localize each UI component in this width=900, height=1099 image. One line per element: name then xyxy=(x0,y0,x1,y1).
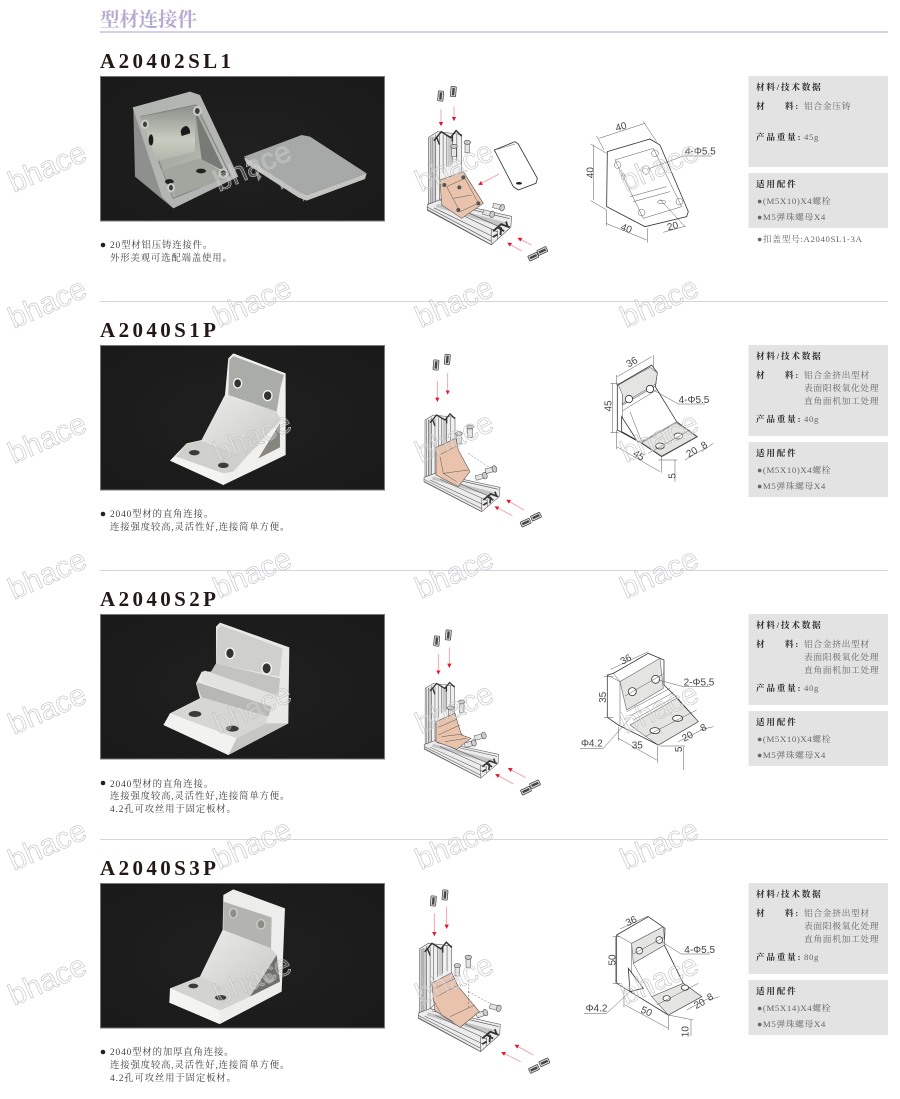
watermark grid: bhace xyxy=(3,407,92,470)
panel: material data: 表面阳极氧化处理 xyxy=(804,382,879,393)
watermark grid: bhace xyxy=(3,136,92,199)
panel: material data: 铝合金挤出型材 xyxy=(804,638,870,649)
panel: fittings: ●(M5X14)X4螺栓 xyxy=(757,1002,831,1013)
panel: material data: 材 xyxy=(756,907,766,918)
panel: material data: 铝合金挤出型材 xyxy=(804,369,870,380)
dimension drawing xyxy=(580,652,715,770)
product photo xyxy=(100,346,384,490)
description: 连接强度较高,灵活性好,连接简单方便。 xyxy=(110,1059,290,1071)
panel: fittings: ●M5弹珠螺母X4 xyxy=(757,211,826,222)
dimension drawing: 4-Φ5.5 xyxy=(684,945,715,956)
bracket render xyxy=(163,623,289,755)
panel: material data: 40g xyxy=(804,414,819,424)
product photo xyxy=(100,884,384,1028)
watermark grid: bhace xyxy=(208,813,297,876)
panel: material data: 表面阳极氧化处理 xyxy=(804,920,879,931)
watermark grid: bhace xyxy=(3,543,92,606)
watermark grid: bhace xyxy=(615,406,704,469)
panel: fittings: ●M5弹珠螺母X4 xyxy=(757,480,826,491)
cap model note: ●扣盖型号:A2040SL1-3A xyxy=(757,233,862,244)
dimension drawing: 45 xyxy=(631,448,646,464)
panel: material data: 45g xyxy=(804,132,819,142)
watermark grid: bhace xyxy=(615,542,704,605)
page heading: 型材连接件 xyxy=(100,9,198,31)
description: 4.2孔可攻丝用于固定板材。 xyxy=(110,803,237,815)
product title: A2040S3P xyxy=(100,856,219,880)
panel: fittings: ●M5弹珠螺母X4 xyxy=(757,1018,826,1029)
panel: material data: 产品重量: xyxy=(756,951,802,962)
section: A2040S2P xyxy=(100,570,888,815)
panel: material data: 料: xyxy=(785,369,800,380)
dimension drawing: 2-Φ5.5 xyxy=(684,678,715,689)
dimension drawing: 20 xyxy=(692,997,708,1012)
watermark grid: bhace xyxy=(208,948,297,1011)
watermark grid: bhace xyxy=(410,677,499,740)
watermark grid: bhace xyxy=(410,271,499,334)
bracket and end cap render xyxy=(133,92,367,208)
dimension drawing: 36 xyxy=(619,652,634,667)
description: 20型材铝压铸连接件。 xyxy=(110,239,213,251)
dimension drawing: 8 xyxy=(699,440,710,452)
description xyxy=(101,1046,290,1084)
dimension drawing: 40 xyxy=(619,222,634,236)
watermark grid: bhace xyxy=(208,406,297,469)
dimension drawing: 4-Φ5.5 xyxy=(679,395,710,406)
dimension drawing: 8 xyxy=(699,722,709,735)
dimension drawing: 20 xyxy=(685,445,700,460)
dimension drawing: 50 xyxy=(607,954,618,966)
description xyxy=(101,239,233,264)
panel: material data xyxy=(748,614,888,705)
dimension drawing: 20 xyxy=(680,729,696,744)
description: 2040型材的加厚直角连接。 xyxy=(110,1046,234,1058)
panel: material data: 材料/技术数据 xyxy=(756,81,823,92)
panel: material data: 铝合金挤出型材 xyxy=(804,907,870,918)
watermark grid: bhace xyxy=(3,949,92,1012)
watermark grid: bhace xyxy=(3,678,92,741)
product title: A2040S1P xyxy=(100,318,219,342)
panel: material data: 直角面机加工处理 xyxy=(804,664,879,675)
section: A2040S1P xyxy=(100,301,888,533)
dimension drawing: 36 xyxy=(624,914,639,929)
watermark grid: bhace xyxy=(410,948,499,1011)
dimension drawing: 50 xyxy=(639,1005,654,1020)
panel: material data xyxy=(748,345,888,436)
watermark grid: bhace xyxy=(410,813,499,876)
dimension drawing: 4-Φ5.5 xyxy=(685,147,716,158)
watermark grid: bhace xyxy=(208,677,297,740)
dimension drawing: 5 xyxy=(674,746,685,752)
assembly diagram xyxy=(424,630,541,795)
dimension drawing: 5 xyxy=(667,473,678,479)
dimension drawing: Φ4.2 xyxy=(581,739,603,750)
dimension drawing: 20 xyxy=(666,220,680,234)
panel: material data: 直角面机加工处理 xyxy=(804,933,879,944)
panel: material data: 材料/技术数据 xyxy=(756,619,823,630)
watermark grid xyxy=(3,135,704,1012)
dimension drawing: 40 xyxy=(614,120,629,134)
panel: fittings: ●(M5X10)X4螺栓 xyxy=(757,733,831,744)
product photo xyxy=(100,76,384,221)
panel: fittings: ●(M5X10)X4螺栓 xyxy=(757,464,831,475)
panel: material data: 产品重量: xyxy=(756,131,802,142)
description: 4.2孔可攻丝用于固定板材。 xyxy=(110,1072,237,1084)
watermark grid: bhace xyxy=(410,542,499,605)
panel: material data: 40g xyxy=(804,683,819,693)
panel: material data: 料: xyxy=(785,638,800,649)
panel: material data: 料: xyxy=(785,100,800,111)
panel: material data: 材料/技术数据 xyxy=(756,350,823,361)
panel: material data: 铝合金压铸 xyxy=(804,100,851,111)
panel: material data: 材 xyxy=(756,100,766,111)
dimension drawing: 10 xyxy=(681,1026,692,1037)
dimension drawing xyxy=(585,120,716,243)
watermark grid: bhace xyxy=(410,406,499,469)
watermark grid: bhace xyxy=(615,135,704,198)
description: 2040型材的直角连接。 xyxy=(110,778,214,790)
panel: fittings: ●M5弹珠螺母X4 xyxy=(757,749,826,760)
panel: material data: 直角面机加工处理 xyxy=(804,395,879,406)
watermark grid: bhace xyxy=(208,271,297,334)
panel: material data xyxy=(748,883,888,974)
panel: material data: 材料/技术数据 xyxy=(756,888,823,899)
watermark grid: bhace xyxy=(3,814,92,877)
panel: material data: 材 xyxy=(756,369,766,380)
watermark grid: bhace xyxy=(615,948,704,1011)
panel: material data: 产品重量: xyxy=(756,413,802,424)
panel: fittings xyxy=(748,711,888,766)
watermark grid: bhace xyxy=(3,272,92,335)
bracket render xyxy=(170,353,286,485)
dimension drawing: 40 xyxy=(585,167,596,178)
panel: fittings xyxy=(748,980,888,1035)
watermark grid: bhace xyxy=(208,542,297,605)
dimension drawing: Φ4.2 xyxy=(586,1004,608,1015)
dimension drawing: 35 xyxy=(632,741,643,752)
dimension drawing xyxy=(584,914,719,1037)
description xyxy=(101,508,290,533)
panel: fittings: 适用配件 xyxy=(756,178,798,189)
product title: A20402SL1 xyxy=(100,49,234,73)
panel: material data: 80g xyxy=(804,952,819,962)
description: 2040型材的直角连接。 xyxy=(110,508,214,520)
panel: fittings xyxy=(748,442,888,497)
bracket render xyxy=(169,889,285,1024)
dimension drawing: 35 xyxy=(598,691,609,703)
assembly diagram xyxy=(424,354,542,527)
dimension drawing: 45 xyxy=(603,400,614,412)
panel: material data: 产品重量: xyxy=(756,682,802,693)
dimension drawing xyxy=(603,355,713,482)
panel: material data: 料: xyxy=(785,907,800,918)
description: 连接强度较高,灵活性好,连接简单方便。 xyxy=(110,790,290,802)
section: A2040S3P xyxy=(100,839,888,1084)
panel: material data xyxy=(748,76,888,167)
assembly diagram xyxy=(427,86,548,261)
panel: material data: 表面阳极氧化处理 xyxy=(804,651,879,662)
assembly diagram xyxy=(418,890,550,1074)
panel: fittings: 适用配件 xyxy=(756,985,798,996)
panel: fittings xyxy=(748,173,888,228)
product title: A2040S2P xyxy=(100,587,219,611)
watermark grid: bhace xyxy=(410,135,499,198)
dimension drawing: 8 xyxy=(705,991,716,1004)
watermark grid: bhace xyxy=(208,135,297,198)
watermark grid: bhace xyxy=(615,677,704,740)
product photo xyxy=(100,614,384,759)
panel: fittings: 适用配件 xyxy=(756,716,798,727)
watermark grid: bhace xyxy=(615,813,704,876)
panel: fittings: 适用配件 xyxy=(756,447,798,458)
description xyxy=(101,778,290,815)
dimension drawing: 36 xyxy=(625,355,640,370)
description: 连接强度较高,灵活性好,连接简单方便。 xyxy=(110,521,290,533)
watermark grid: bhace xyxy=(615,271,704,334)
description: 外形美观可选配端盖使用。 xyxy=(110,252,233,264)
panel: material data: 材 xyxy=(756,638,766,649)
panel: fittings: ●(M5X10)X4螺栓 xyxy=(757,195,831,206)
section: A20402SL1 xyxy=(100,49,888,264)
